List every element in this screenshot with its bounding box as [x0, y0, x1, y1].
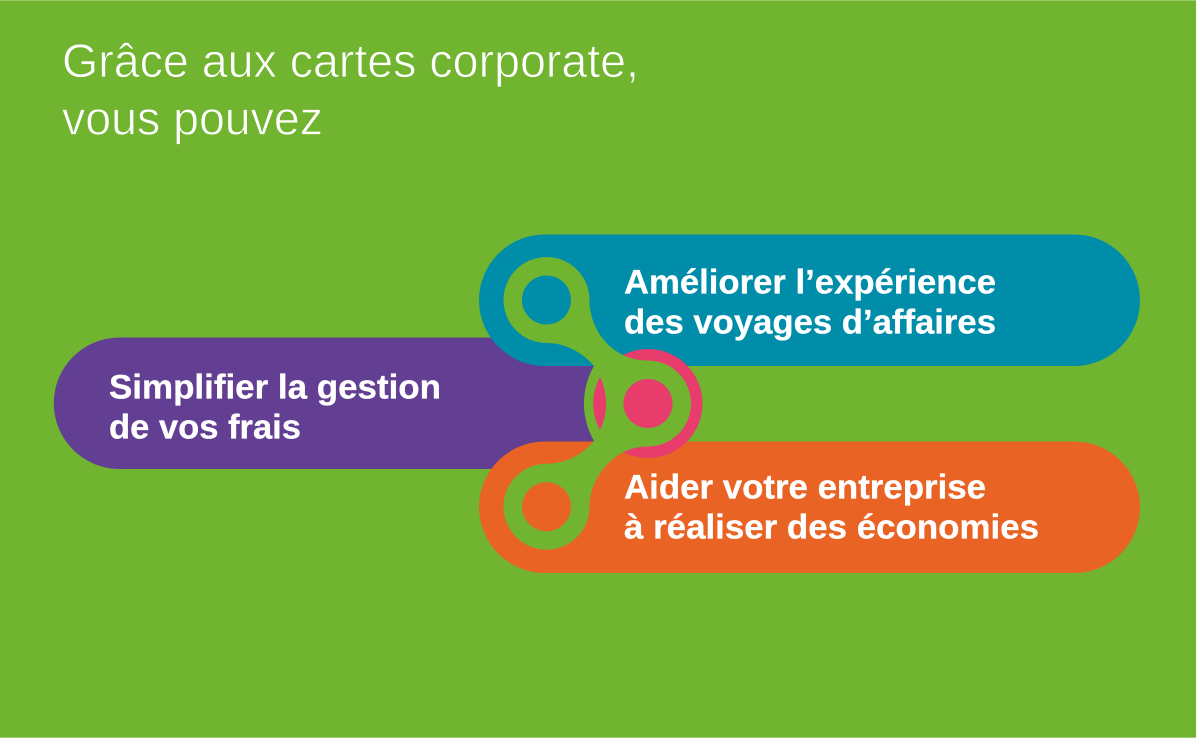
title: Grâce aux cartes corporate,	[62, 34, 639, 87]
icon: orange node	[522, 482, 571, 531]
title	[62, 34, 639, 144]
text: teal label: des voyages d’affaires	[624, 304, 996, 342]
text: orange label: Aider votre entreprise	[624, 468, 986, 506]
text: orange label	[624, 468, 1039, 546]
text: purple label: de vos frais	[109, 408, 301, 446]
icon: teal node	[522, 276, 571, 324]
text: teal label	[624, 264, 996, 342]
icon: pink ring	[594, 349, 702, 458]
icon: green linked chain	[503, 257, 691, 550]
title: vous pouvez	[62, 92, 323, 144]
icon: pink lens	[593, 377, 606, 430]
panel: teal pill	[479, 234, 1140, 366]
text: teal label: Améliorer l’expérience	[624, 264, 996, 302]
text: purple label	[109, 368, 441, 446]
text: orange label: à réaliser des économies	[624, 508, 1039, 546]
panel: purple pill	[54, 338, 620, 469]
icon: pink node	[624, 379, 672, 428]
panel: orange pill	[479, 442, 1140, 573]
text: purple label: Simplifier la gestion	[109, 368, 441, 406]
